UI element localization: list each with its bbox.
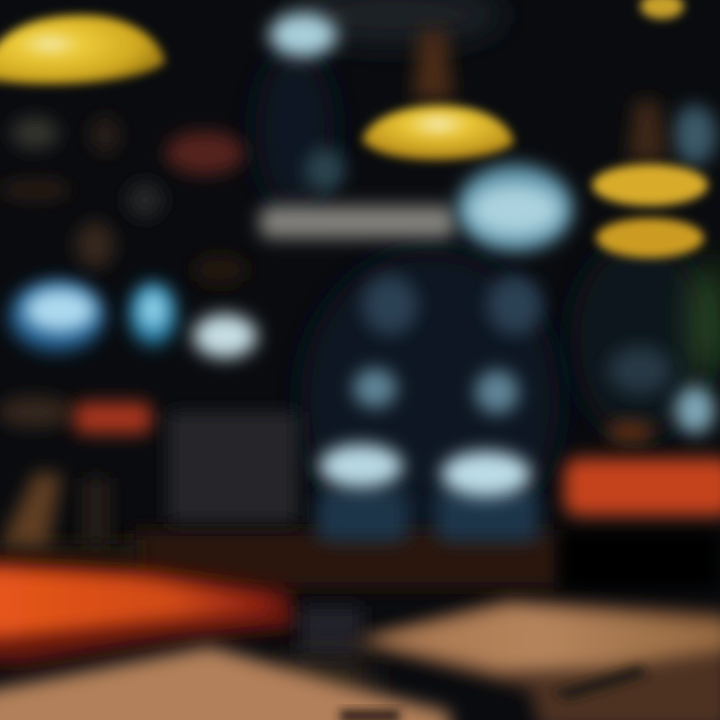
shelves: left wall [0,115,298,522]
dark gap between tables [280,606,370,700]
wooden table: right foreground [352,600,720,720]
pendant lamp: centre [362,30,514,160]
glowing blue signs [9,13,717,434]
wooden chair: left [0,472,110,548]
horizontal counter band [260,164,573,252]
orange cushion: right [564,421,720,516]
cabinet panels [316,275,543,542]
orange cushion: left foreground [0,560,298,665]
wooden table: left foreground [0,646,450,720]
pendant lamp: top left [0,15,165,84]
pendant lamp: right stack [592,0,708,258]
